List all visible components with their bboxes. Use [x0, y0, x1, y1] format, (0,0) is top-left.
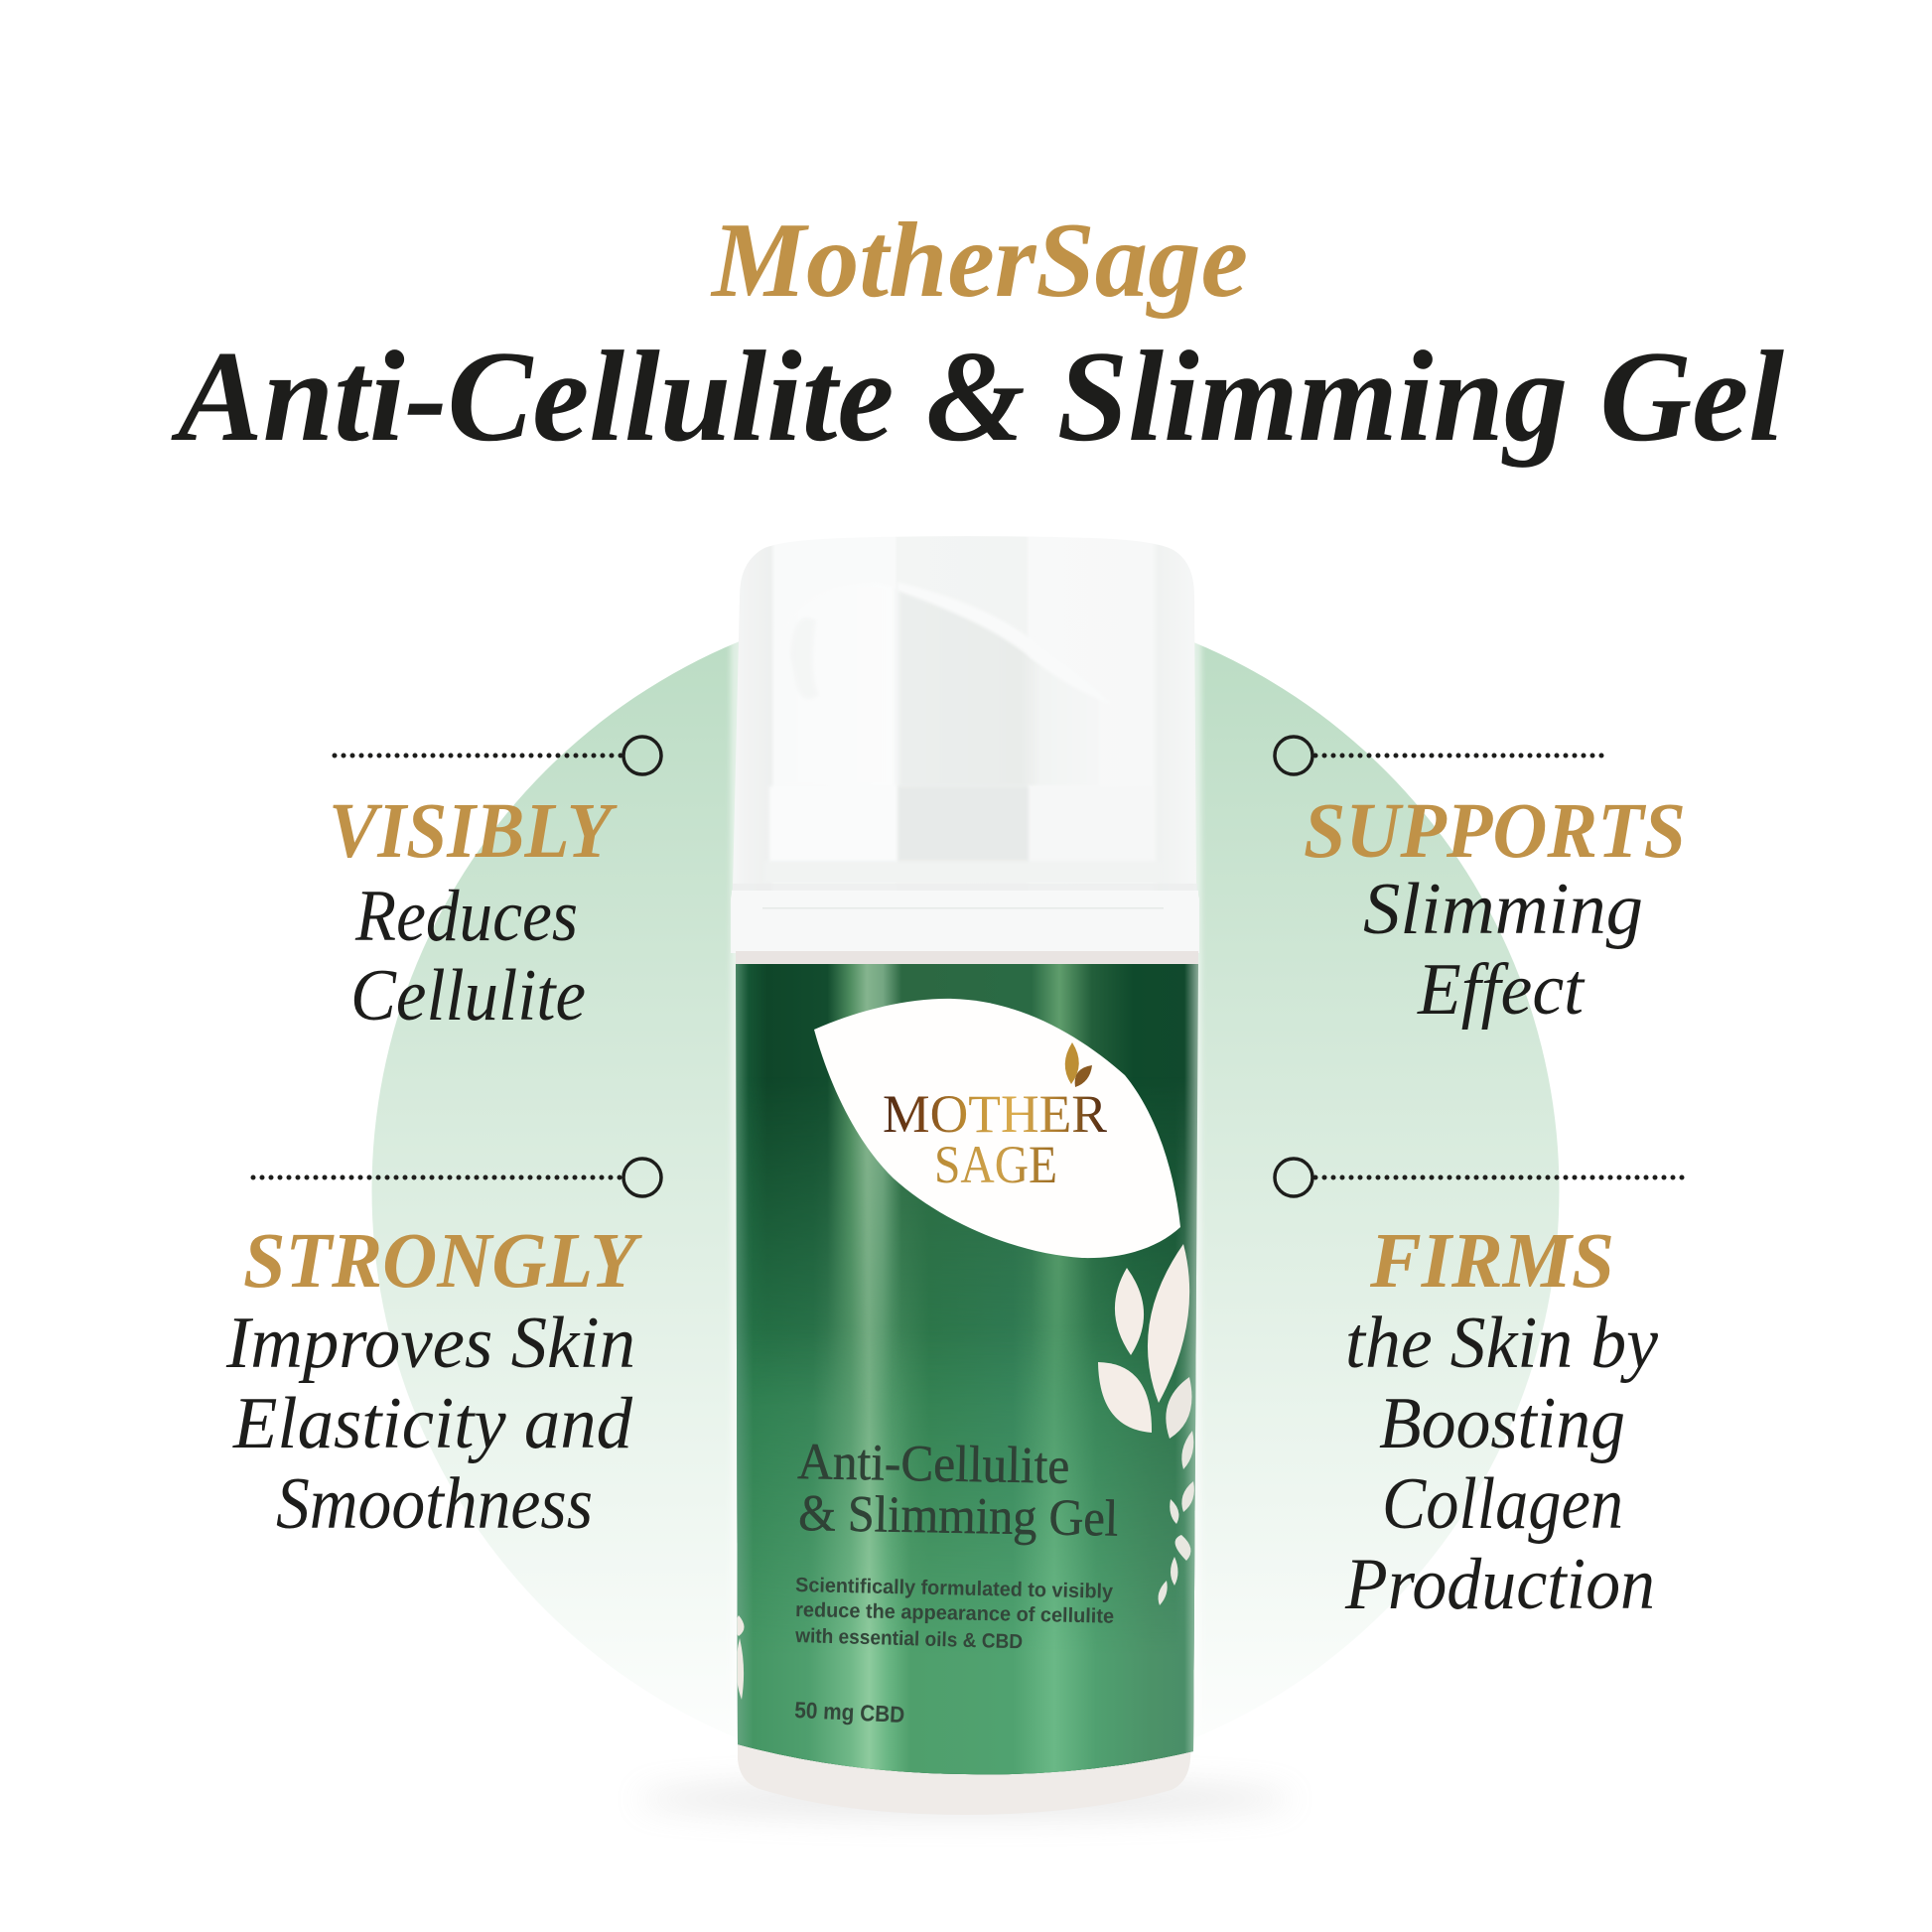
- body text: Slimming: [1363, 869, 1643, 950]
- brand name: MotherSage: [710, 202, 1248, 320]
- connector: [253, 1159, 661, 1196]
- small decorative leaves: [1098, 1244, 1194, 1605]
- callout: visibly reduces cellulite: [329, 737, 661, 1036]
- product bottle: [637, 536, 1293, 1815]
- body text: Improves Skin: [225, 1303, 635, 1384]
- green label: [730, 958, 1206, 1782]
- logo sprig icon: [1065, 1042, 1092, 1087]
- logo word mother: MOTHER: [883, 1084, 1107, 1144]
- body text: [225, 1303, 635, 1545]
- body text: Reduces: [354, 876, 578, 957]
- heading: SUPPORTS: [1304, 788, 1686, 875]
- floor shadow: [637, 1783, 1293, 1815]
- pump head: [776, 583, 1099, 786]
- body text: Boosting: [1379, 1383, 1625, 1464]
- brand logo on bottle: [883, 1042, 1107, 1194]
- body text: the Skin by: [1345, 1303, 1658, 1384]
- connector: [1275, 1159, 1685, 1196]
- label product name: & Slimming Gel: [798, 1485, 1119, 1548]
- body text: Effect: [1417, 949, 1586, 1031]
- heading: VISIBLY: [329, 788, 618, 875]
- cap collar band: [736, 951, 1198, 964]
- callout: firms the skin: [1275, 1159, 1685, 1625]
- label description: with essential oils & CBD: [794, 1624, 1023, 1653]
- bottle halo: [731, 544, 1201, 1750]
- green gradient circle: [371, 597, 1559, 1784]
- pump cap: [731, 536, 1199, 964]
- label product name: [797, 1434, 1119, 1548]
- body text: [1344, 1303, 1658, 1625]
- label product name: Anti-Cellulite: [797, 1434, 1070, 1495]
- body text: Collagen: [1382, 1463, 1623, 1545]
- body text: Elasticity and: [232, 1383, 633, 1464]
- label description: [794, 1574, 1114, 1653]
- product name: Anti-Cellulite & Slimming Gel: [171, 325, 1785, 469]
- infographic: [171, 221, 1784, 1822]
- body text: [350, 876, 586, 1036]
- body text: Cellulite: [350, 955, 586, 1036]
- large white leaf: [814, 999, 1180, 1258]
- body text: [1363, 869, 1643, 1031]
- label description: Scientifically formulated to visibly: [795, 1574, 1114, 1603]
- body text: Smoothness: [276, 1463, 593, 1545]
- heading: STRONGLY: [243, 1218, 643, 1305]
- connector: [1275, 737, 1602, 774]
- bottle base: [738, 1732, 1192, 1815]
- connector: [335, 737, 661, 774]
- heading: FIRMS: [1369, 1218, 1614, 1305]
- callout: supports slimming effect: [1275, 737, 1686, 1031]
- label dosage: 50 mg CBD: [794, 1697, 905, 1727]
- title: [171, 202, 1785, 469]
- body text: Production: [1344, 1544, 1655, 1625]
- callout: strongly improves skin elasticity: [225, 1159, 661, 1545]
- label description: reduce the appearance of cellulite: [795, 1598, 1114, 1628]
- pump collar: [764, 786, 1162, 884]
- logo word sage: SAGE: [934, 1135, 1057, 1194]
